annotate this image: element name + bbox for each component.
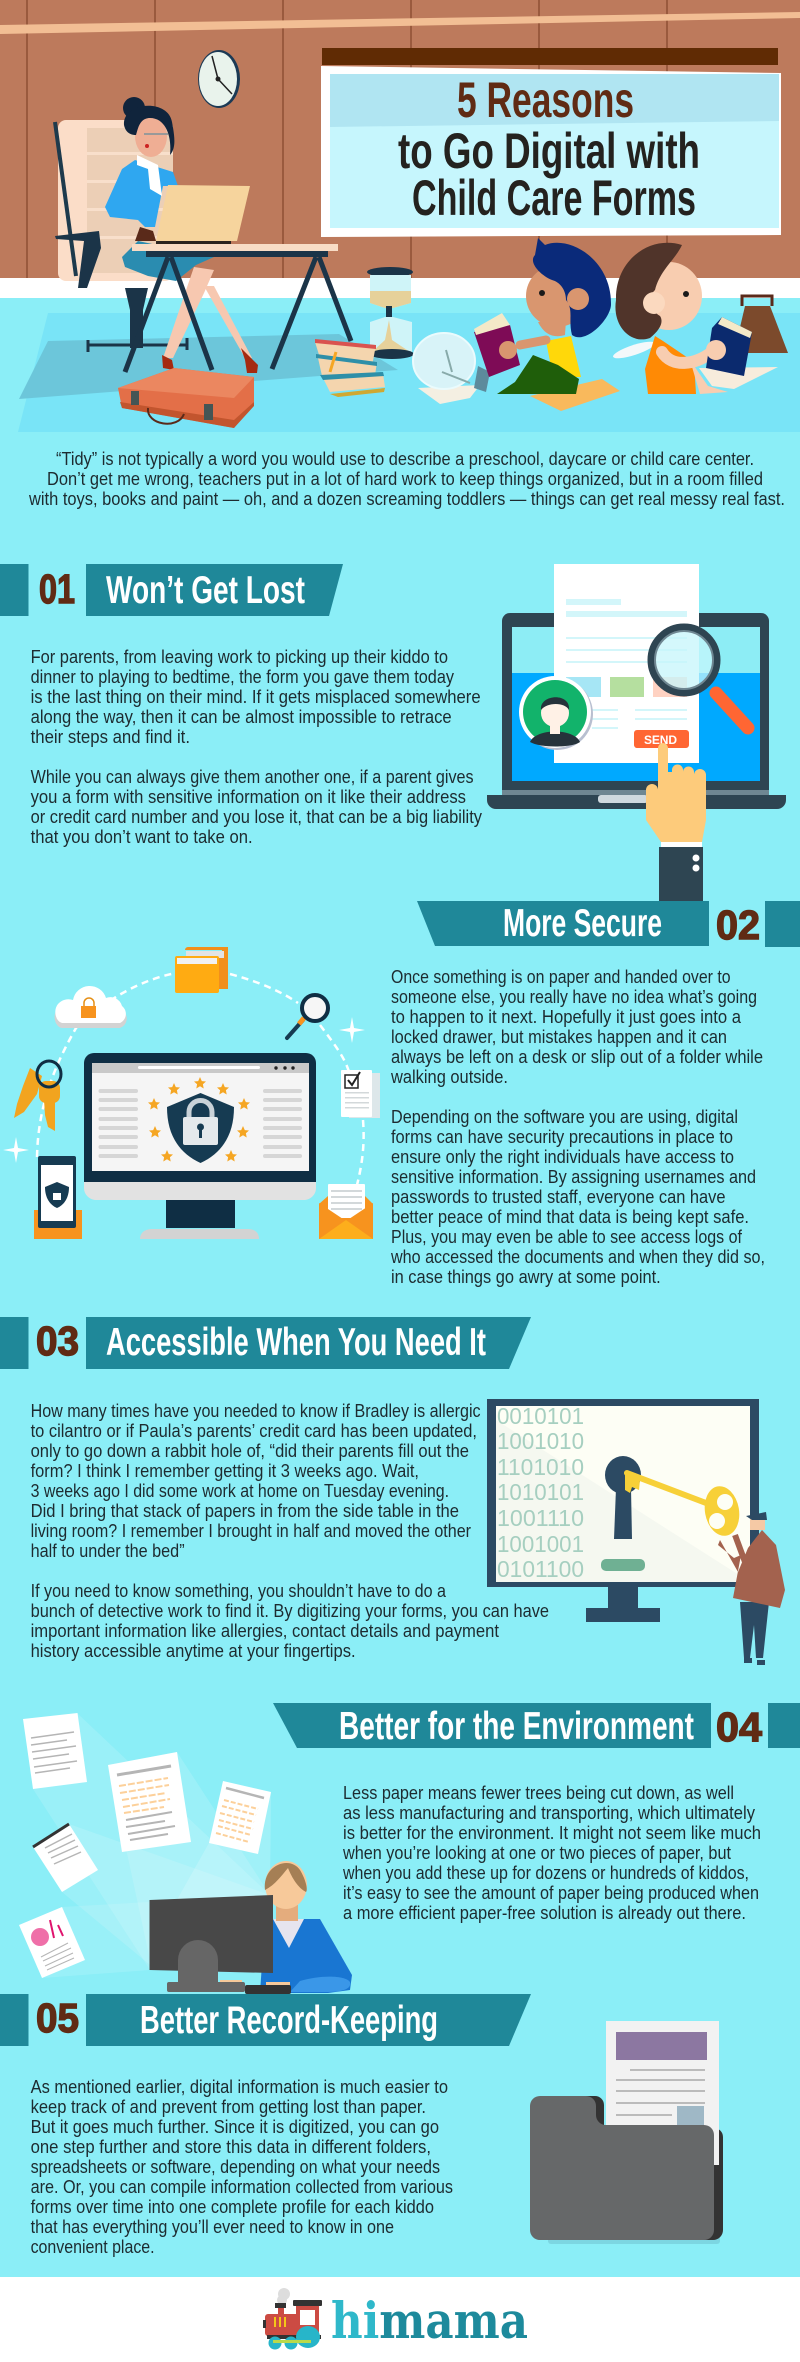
icon: avatar xyxy=(519,676,593,750)
illustration: woman at desk xyxy=(55,97,351,373)
text block 04: when you’re looking at one or two pieces of paper, but xyxy=(342,1842,731,1863)
text block 04: when you add these up for dozens or hundreds of kiddos, xyxy=(342,1862,749,1883)
heading 02 xyxy=(417,901,800,948)
window title board xyxy=(321,48,781,237)
heading 01: Won’t Get Lost xyxy=(106,569,305,612)
text block 05: keep track of and prevent from getting lost than paper. xyxy=(31,2096,426,2117)
icon: keys xyxy=(14,1061,61,1131)
legs xyxy=(163,267,214,358)
icon: sparkles xyxy=(3,1017,365,1163)
text block 02: sensitive information. By assigning usernames and xyxy=(391,1166,756,1187)
icon: checklist document xyxy=(341,1070,380,1118)
icon: wall clock xyxy=(198,50,240,108)
binary digits: 1101010 xyxy=(497,1454,584,1480)
send button: SEND xyxy=(644,733,677,747)
icon: phone xyxy=(34,1156,82,1239)
text block 04 xyxy=(342,1782,761,1923)
icon: stack of books xyxy=(315,339,385,397)
panel: reason 03 xyxy=(0,1317,785,1665)
illustration: monitor with key xyxy=(487,1399,785,1665)
heading 04: 04 xyxy=(716,1704,762,1750)
person at computer xyxy=(150,1861,352,1994)
text block 05 xyxy=(31,2076,453,2257)
panel: reason 01 xyxy=(0,564,786,901)
paper 3 xyxy=(209,1781,271,1854)
text block 02: ensure only the right individuals have access to xyxy=(391,1146,734,1167)
text block 03: history accessible anytime at your fingertips. xyxy=(31,1640,356,1661)
text block 01: that you don’t want to take on. xyxy=(31,826,253,847)
heading 05 xyxy=(0,1994,531,2046)
text block 03: to cilantro or if Paula’s parents’ credit card has been updated, xyxy=(31,1420,477,1441)
paper 1 xyxy=(23,1713,87,1789)
heading 03: 03 xyxy=(36,1318,79,1364)
text block 01: along the way, then it can be almost impossible to retrace xyxy=(31,706,452,727)
text block 02: forms can have security precautions in place to xyxy=(391,1126,733,1147)
illustration: laptop with form xyxy=(487,564,786,901)
text block 05: convenient place. xyxy=(31,2236,155,2257)
text block 04: Less paper means fewer trees being cut down, as well xyxy=(343,1782,734,1803)
binary digits: 1010101 xyxy=(497,1479,584,1505)
heading 05: Better Record-Keeping xyxy=(140,1999,438,2042)
logo wordmark: himama xyxy=(331,2291,528,2350)
text block 03: important information like allergies, contact details and payment xyxy=(31,1620,499,1641)
title: to Go Digital with xyxy=(398,123,700,179)
binary digits: 1001010 xyxy=(497,1428,584,1454)
text block 01: is the last thing on their mind. If it gets misplaced somewhere xyxy=(31,686,481,707)
binary digits: 1001001 xyxy=(497,1531,584,1557)
panel: reason 04 xyxy=(19,1703,800,1994)
text block 02 xyxy=(390,966,765,1287)
text block 01: While you can always give them another one, if a parent gives xyxy=(31,766,474,787)
text block 03: half to under the bed” xyxy=(31,1540,185,1561)
icon: train logo xyxy=(263,2288,322,2350)
text block 03: form? I think I remember getting it 3 weeks ago. Wait, xyxy=(31,1460,419,1481)
illustration: boy reading xyxy=(474,238,620,411)
text block 01: you a form with sensitive information on it like their address xyxy=(31,786,466,807)
text block 02: Once something is on paper and handed over to xyxy=(391,966,731,987)
text block 03: If you need to know something, you shouldn’t have to do a xyxy=(31,1580,447,1601)
torso xyxy=(105,160,178,227)
illustration: folder with document xyxy=(530,2021,723,2244)
heading 02: 02 xyxy=(716,902,760,948)
text block 02: Plus, you may even be able to see access logs of xyxy=(391,1226,743,1247)
binary digits: 0010101 xyxy=(497,1403,584,1429)
heading 05: 05 xyxy=(36,1995,79,2041)
icon: cloud with lock xyxy=(55,986,127,1028)
icon: golden key xyxy=(625,1472,743,1539)
paper 2 xyxy=(108,1752,191,1852)
heading 01 xyxy=(0,564,343,616)
icon: briefcase xyxy=(118,368,254,428)
text block 03: How many times have you needed to know if Bradley is allergic xyxy=(31,1400,481,1421)
binary digits xyxy=(497,1403,584,1582)
text block 02: Depending on the software you are using, digital xyxy=(391,1106,738,1127)
panel: footer xyxy=(0,2277,800,2362)
icon: magnifying glass xyxy=(651,627,748,728)
title xyxy=(398,72,700,226)
text block 05: As mentioned earlier, digital information is much easier to xyxy=(31,2076,448,2097)
text block 02: in case things go awry at some point. xyxy=(391,1266,661,1287)
text block 04: as less manufacturing and transporting, which ultimately xyxy=(343,1802,756,1823)
heading 03 xyxy=(0,1317,531,1369)
text block 05: But it goes much further. Since it is digitized, you can go xyxy=(31,2116,439,2137)
icon: magnifier xyxy=(287,995,328,1038)
icon: light bulb xyxy=(413,333,490,404)
send button xyxy=(634,730,689,748)
text block 02: passwords to trusted staff, everyone can have xyxy=(391,1186,726,1207)
text block 01: their steps and find it. xyxy=(31,726,190,747)
panel: reason 05 xyxy=(0,1994,723,2257)
text block 05: one step further and store this data in different folders, xyxy=(31,2136,431,2157)
icon: keyhole xyxy=(605,1456,641,1539)
icon: ring of stars xyxy=(148,1077,250,1162)
text block 03: Did I bring that stack of papers in from the side table in the xyxy=(31,1500,459,1521)
panel: reason 02 xyxy=(3,901,800,1287)
illustration: girl reading xyxy=(612,243,788,394)
icon: shield with padlock xyxy=(167,1093,234,1163)
text block 02: always be left on a desk or slip out of a folder while xyxy=(391,1046,763,1067)
paper 4 xyxy=(33,1824,98,1892)
icon: envelope xyxy=(319,1184,373,1239)
text block 02: walking outside. xyxy=(390,1066,508,1087)
text block 01: or credit card number and you lose it, that can be a big liability xyxy=(31,806,483,827)
icon: folders xyxy=(175,947,228,993)
text block 04: is better for the environment. It might not seem like much xyxy=(343,1822,761,1843)
binary digits: 1001110 xyxy=(497,1505,584,1531)
intro text xyxy=(28,448,785,509)
heading 01: 01 xyxy=(39,566,75,612)
laptop xyxy=(156,185,250,241)
text block 04: a more efficient paper-free solution is already out there. xyxy=(343,1902,746,1923)
icon: pointing hand xyxy=(646,743,706,901)
heading 02: More Secure xyxy=(503,902,662,945)
text block 01 xyxy=(31,646,483,847)
illustration: papers flying from computer xyxy=(19,1713,352,1994)
text block 02: locked drawer, but mistakes happen and it can xyxy=(391,1026,727,1047)
text block 03: 3 weeks ago I did some work at home on Tuesday evening. xyxy=(31,1480,449,1501)
text block 03: living room? I remember I brought in half and moved the other xyxy=(31,1520,471,1541)
panel: header scene xyxy=(0,0,800,432)
heading 03: Accessible When You Need It xyxy=(106,1321,486,1364)
title: 5 Reasons xyxy=(457,72,634,128)
text block 01: dinner to playing to bedtime, the form you gave them today xyxy=(31,666,455,687)
text block 05: spreadsheets or software, depending on what your needs xyxy=(31,2156,440,2177)
text block 03: only to go down a rabbit hole of, “did their parents fill out the xyxy=(31,1440,469,1461)
icon: hourglass xyxy=(367,267,414,359)
text block 05: are. Or, you can compile information collected from various xyxy=(31,2176,453,2197)
monitor xyxy=(84,1053,316,1239)
illustration: man holding key xyxy=(718,1512,785,1665)
text block 05: that has everything you’ll ever need to know in one xyxy=(31,2216,394,2237)
illustration: security ring xyxy=(3,947,380,1239)
text block 02: better peace of mind that data is being kept safe. xyxy=(391,1206,749,1227)
paper 5 xyxy=(19,1907,85,1978)
text block 05: forms over time into one complete profile for each kiddo xyxy=(31,2196,434,2217)
text block 01: For parents, from leaving work to picking up their kiddo to xyxy=(31,646,448,667)
binary digits: 0101100 xyxy=(497,1556,584,1582)
text block 02: to happen to it next. Hopefully it just goes into a xyxy=(391,1006,742,1027)
text block 03 xyxy=(31,1400,549,1661)
head xyxy=(135,115,167,157)
text block 03: bunch of detective work to find it. By digitizing your forms, you can have xyxy=(31,1600,549,1621)
